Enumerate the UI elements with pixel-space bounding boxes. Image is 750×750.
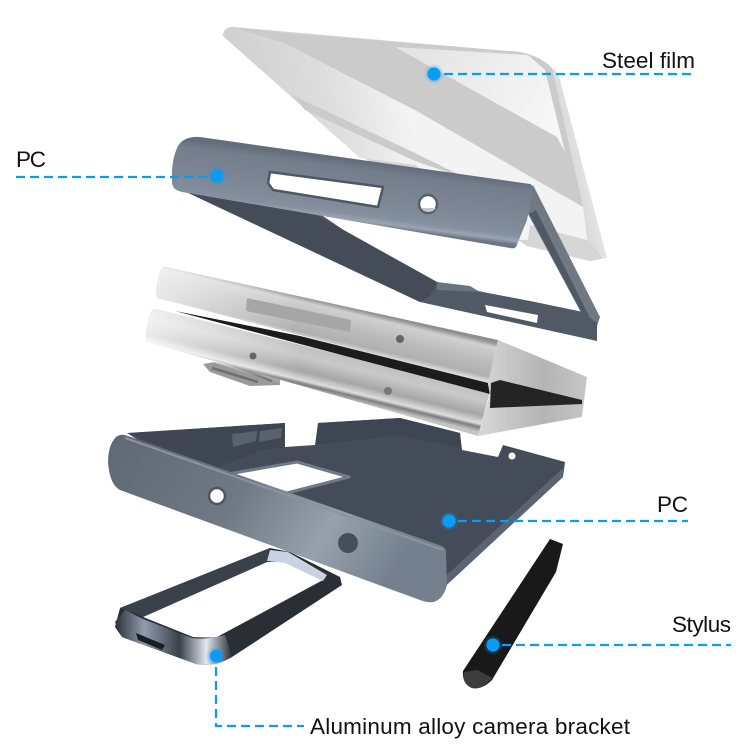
phone sim tray bbox=[246, 298, 351, 332]
top PC frame bbox=[172, 137, 600, 341]
hinge line bbox=[175, 311, 490, 394]
phone upper half bbox=[156, 267, 498, 384]
callout: camera bracket bbox=[206, 646, 631, 739]
stylus bbox=[463, 539, 563, 688]
aluminum camera bracket bbox=[115, 548, 342, 665]
lower slot cutout bbox=[485, 305, 538, 323]
volume keys cutout bbox=[232, 428, 282, 447]
callout: lower PC: PC bbox=[657, 492, 688, 517]
camera opening bbox=[228, 462, 349, 493]
callout: upper PC: PC bbox=[16, 147, 46, 172]
front wall bbox=[108, 435, 447, 602]
folded phone bbox=[146, 267, 587, 436]
phone lower half bbox=[146, 309, 490, 436]
callout: camera bracket: Aluminum alloy camera bracket bbox=[310, 714, 631, 739]
callout: stylus: Stylus bbox=[672, 612, 731, 637]
callout: lower PC bbox=[439, 492, 688, 531]
upper round hole bbox=[419, 195, 437, 213]
callout: upper PC bbox=[16, 147, 227, 186]
wall holes bbox=[209, 488, 225, 504]
callout: stylus bbox=[483, 612, 731, 655]
camera bump bbox=[203, 362, 280, 386]
callout: steel film bbox=[424, 48, 696, 84]
upper slot cutout bbox=[268, 172, 383, 207]
steel film bbox=[223, 27, 607, 261]
bottom PC case bbox=[108, 418, 565, 602]
callout: steel film: Steel film bbox=[602, 48, 695, 73]
phone end face bbox=[478, 340, 587, 436]
